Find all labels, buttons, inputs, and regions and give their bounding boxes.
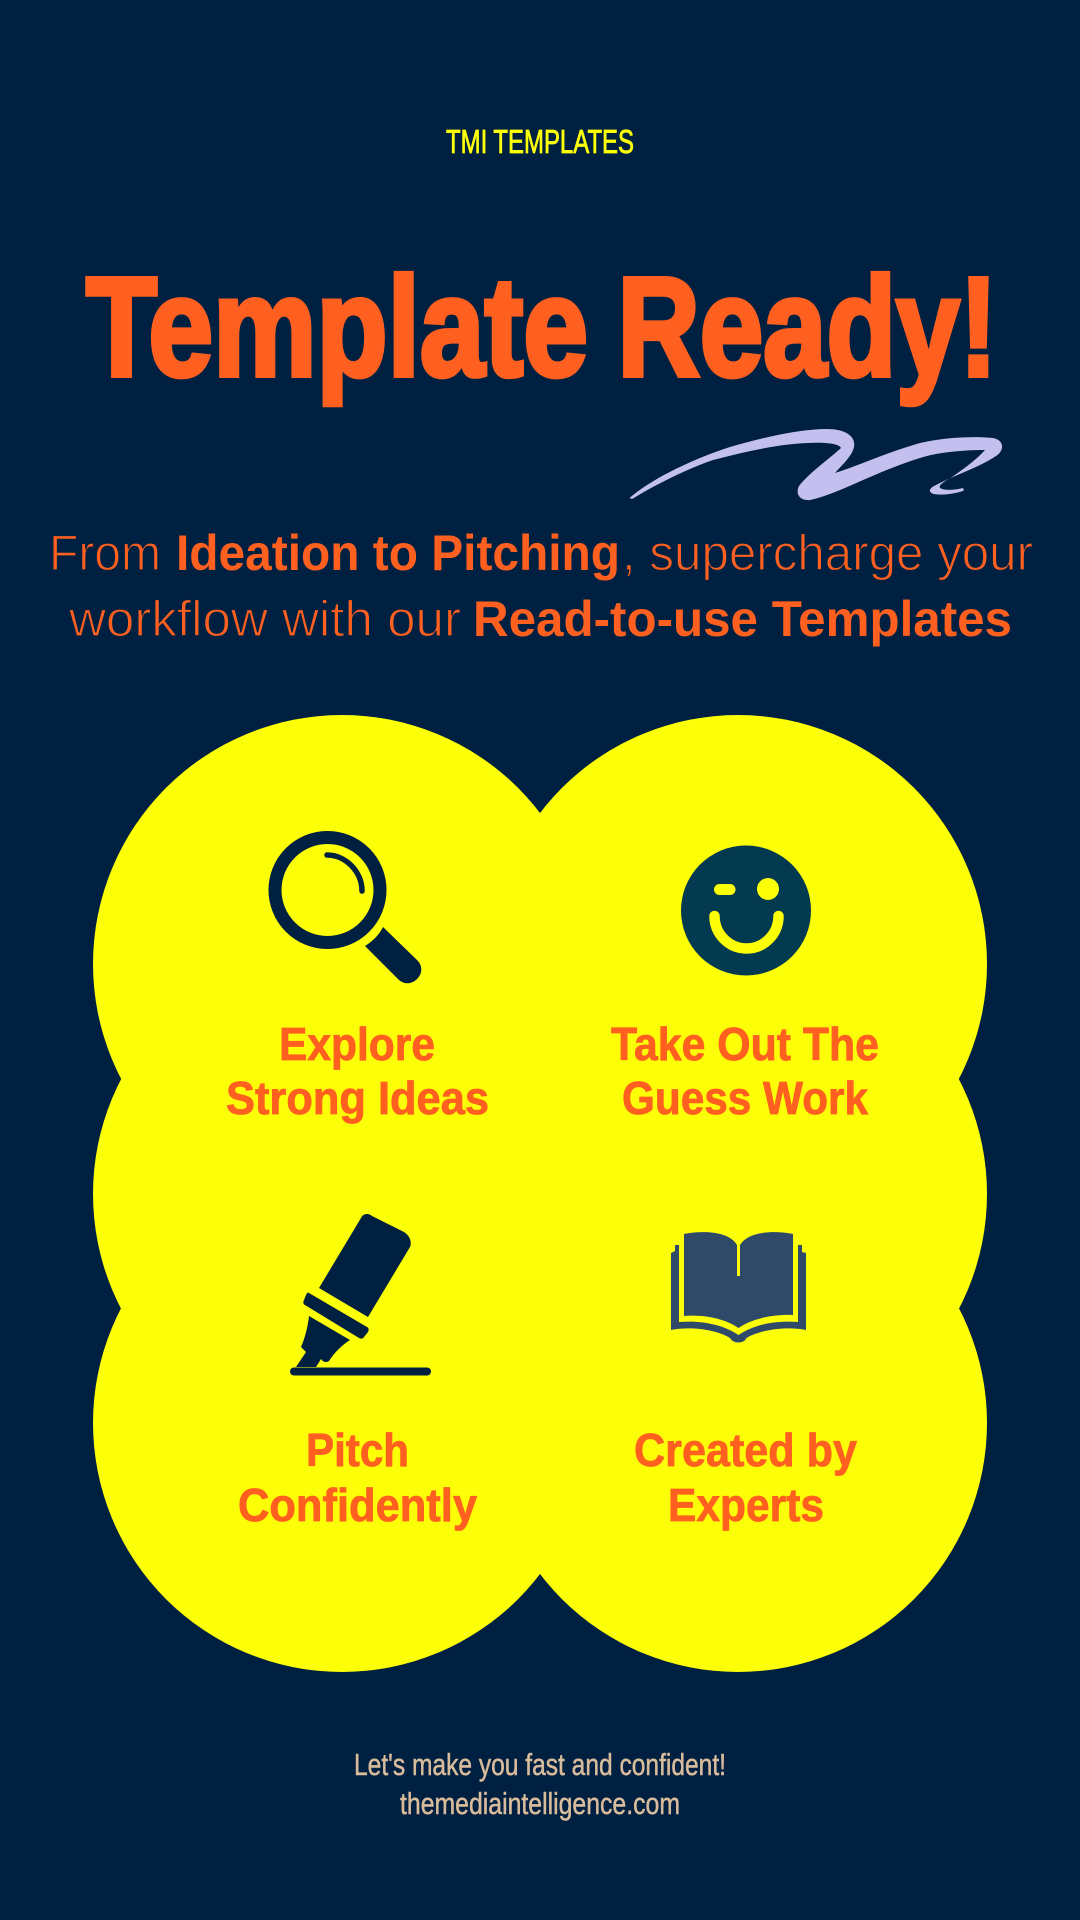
- label: Pitch Confidently: Confidently: [238, 1479, 477, 1531]
- label: Created by Experts: Experts: [668, 1479, 824, 1531]
- subtitle: , supercharge your: [622, 525, 1033, 581]
- title: Template: [86, 248, 588, 406]
- label: Explore Strong Ideas: [226, 1018, 489, 1124]
- footer: themediaintelligence.com: [400, 1786, 680, 1821]
- label: Take Out The Guess Work: Guess Work: [622, 1072, 868, 1124]
- panel: yellow clover of circles: [93, 715, 987, 1672]
- label: Created by Experts: Created by: [634, 1424, 857, 1476]
- decorative squiggle: [630, 429, 1002, 500]
- label: Pitch Confidently: [238, 1424, 477, 1531]
- subtitle: Read-to-use Templates: [473, 591, 1012, 647]
- icon: winking smiley: [681, 846, 811, 976]
- icon: open book: [671, 1232, 806, 1342]
- subtitle: Ideation to Pitching: [176, 525, 620, 581]
- title: [86, 248, 998, 406]
- label: Created by Experts: [634, 1424, 857, 1531]
- subtitle: [49, 525, 1033, 647]
- footer: [354, 1747, 726, 1821]
- label: Take Out The Guess Work: Take Out The: [611, 1018, 879, 1070]
- footer: Let's make you fast and confident!: [354, 1747, 726, 1782]
- label: Pitch Confidently: Pitch: [306, 1424, 409, 1476]
- icon: highlighter: [290, 1214, 431, 1376]
- brand label: TMI TEMPLATES: [446, 123, 634, 160]
- subtitle: workflow with our: [68, 591, 461, 647]
- label: Explore Strong Ideas: Explore: [279, 1018, 435, 1070]
- label: Take Out The Guess Work: [611, 1018, 879, 1124]
- icon: magnifying glass: [275, 838, 421, 983]
- title: Ready!: [618, 248, 998, 406]
- subtitle: From: [49, 525, 161, 581]
- label: Explore Strong Ideas: Strong Ideas: [226, 1072, 489, 1124]
